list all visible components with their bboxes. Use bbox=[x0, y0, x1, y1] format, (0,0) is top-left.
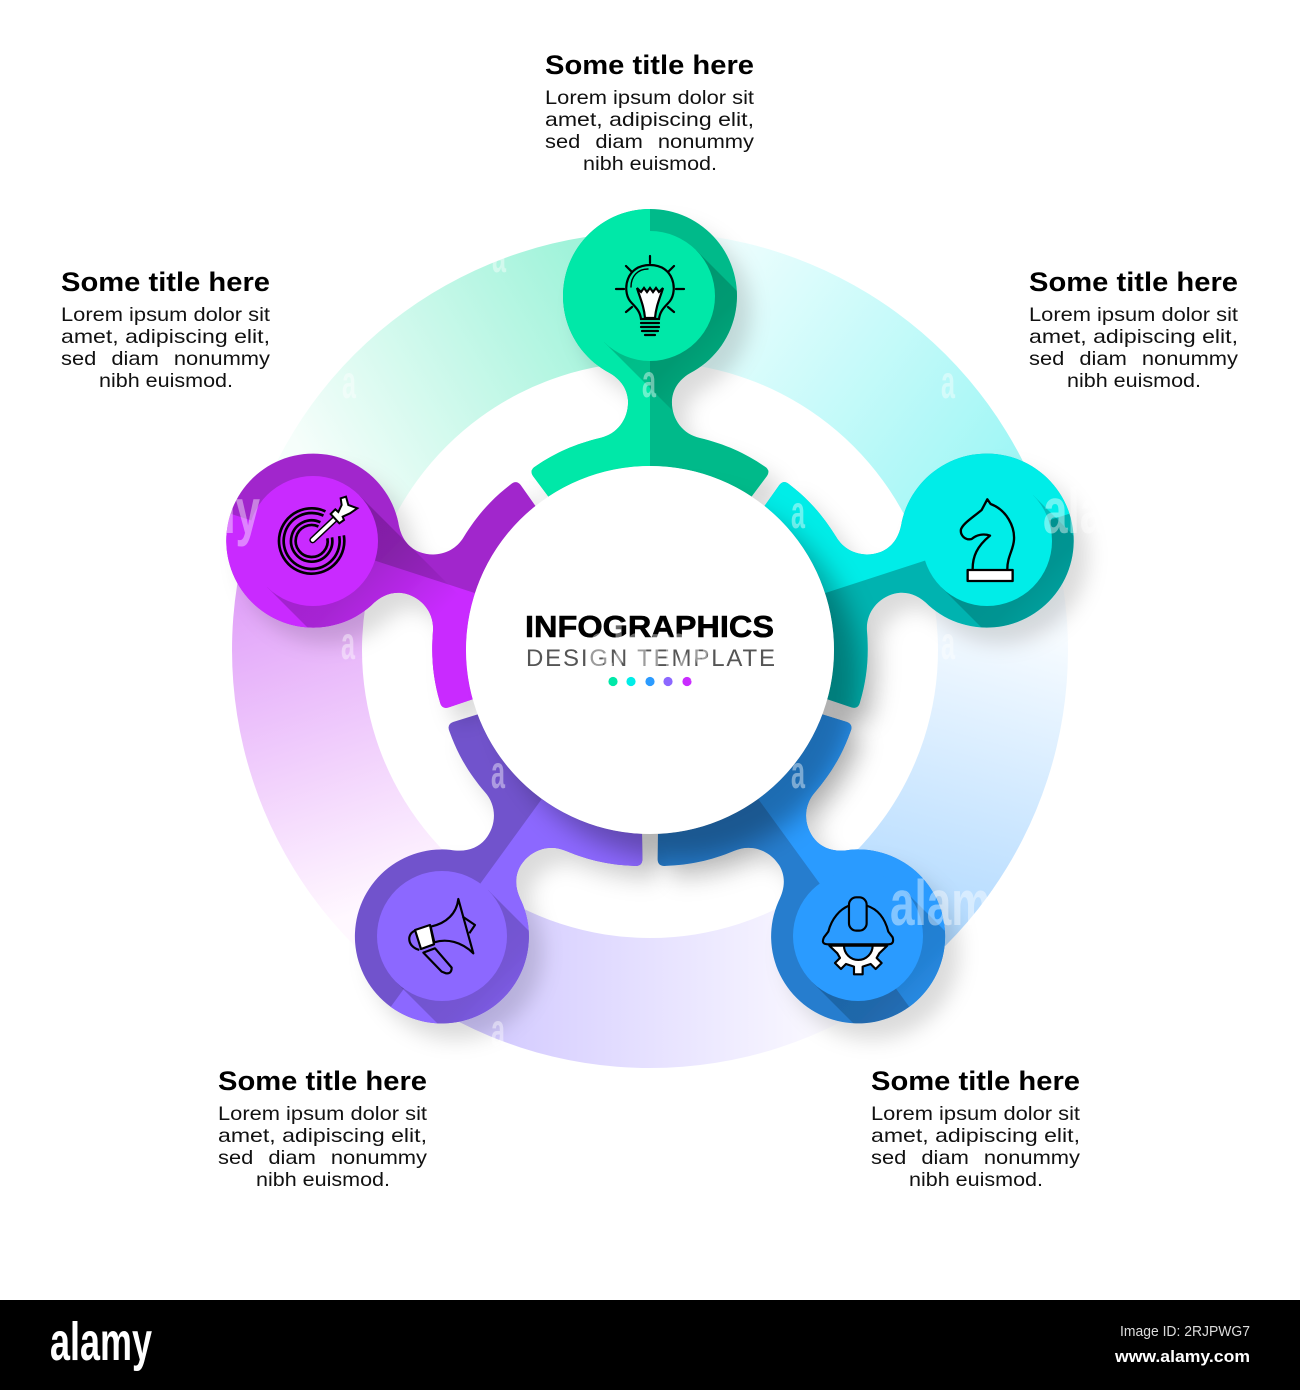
center heading bbox=[525, 609, 775, 686]
central circle shadow bbox=[496, 496, 860, 860]
watermark marks: alamy bbox=[588, 610, 713, 682]
central white circle bbox=[466, 466, 834, 834]
ring segment: green bbox=[252, 232, 650, 561]
ring segment: purple bbox=[404, 883, 896, 1068]
watermark marks: a bbox=[491, 1004, 505, 1056]
title: Some title here bbox=[871, 1066, 1080, 1096]
node: magenta, left bbox=[226, 454, 542, 726]
body copy: amet, adipiscing elit, bbox=[61, 326, 270, 348]
watermark marks: a bbox=[791, 486, 805, 538]
icon: megaphone bbox=[409, 899, 475, 973]
body copy: Lorem ipsum dolor sit bbox=[545, 87, 755, 109]
body copy bbox=[218, 1103, 428, 1191]
watermark marks: a bbox=[341, 617, 355, 669]
body copy: nibh euismod. bbox=[1067, 370, 1201, 392]
body copy bbox=[545, 87, 755, 175]
ring segment: cyan bbox=[650, 232, 1048, 561]
watermark marks: a bbox=[491, 746, 505, 798]
text block: top bbox=[545, 50, 755, 175]
outer gradient ring bbox=[232, 232, 1068, 1068]
body copy: nibh euismod. bbox=[909, 1169, 1043, 1191]
watermark marks: a bbox=[791, 746, 805, 798]
title: Some title here bbox=[218, 1066, 427, 1096]
watermark marks: alamy bbox=[1043, 475, 1168, 547]
watermark marks: alamy bbox=[890, 867, 1015, 939]
text block: upper right bbox=[1029, 267, 1239, 392]
website: www.alamy.com bbox=[1114, 1347, 1250, 1366]
text block: upper left bbox=[61, 267, 271, 392]
body copy: sed diam nonummy bbox=[871, 1147, 1080, 1169]
footer logo: alamy bbox=[50, 1312, 152, 1372]
ring segment: blue bbox=[819, 521, 1068, 988]
body copy: Lorem ipsum dolor sit bbox=[61, 304, 271, 326]
body copy: amet, adipiscing elit, bbox=[545, 109, 754, 131]
body copy: amet, adipiscing elit, bbox=[1029, 326, 1238, 348]
title: Some title here bbox=[545, 50, 754, 80]
heading line: INFOGRAPHICS: INFOGRAPHICS bbox=[525, 609, 774, 644]
body copy: nibh euismod. bbox=[256, 1169, 390, 1191]
ring segment: magenta bbox=[232, 521, 481, 988]
subheading: DESIGN TEMPLATE: DESIGN TEMPLATE bbox=[526, 645, 775, 672]
icon: chess knight bbox=[961, 499, 1014, 581]
node: green, top bbox=[532, 209, 783, 506]
icon: light bulb bbox=[616, 256, 684, 335]
icon: target with arrow bbox=[279, 497, 357, 574]
watermark marks: a bbox=[941, 356, 955, 408]
body copy bbox=[871, 1103, 1081, 1191]
text block: lower left bbox=[218, 1066, 428, 1191]
body copy: sed diam nonummy bbox=[61, 348, 270, 370]
title: Some title here bbox=[61, 267, 270, 297]
body copy: sed diam nonummy bbox=[545, 131, 754, 153]
body copy: Lorem ipsum dolor sit bbox=[871, 1103, 1081, 1125]
watermark marks bbox=[135, 230, 1168, 1056]
watermark marks: a bbox=[342, 356, 356, 408]
text block: lower right bbox=[871, 1066, 1081, 1191]
body copy: sed diam nonummy bbox=[1029, 348, 1238, 370]
colour dots bbox=[608, 677, 692, 686]
watermark marks: a bbox=[492, 230, 506, 282]
body copy: Lorem ipsum dolor sit bbox=[218, 1103, 428, 1125]
watermark marks: a bbox=[642, 355, 656, 407]
node: purple, lower left bbox=[354, 714, 662, 1046]
node: blue, lower right bbox=[658, 714, 966, 1046]
body copy: amet, adipiscing elit, bbox=[871, 1125, 1080, 1147]
body copy: amet, adipiscing elit, bbox=[218, 1125, 427, 1147]
body copy: nibh euismod. bbox=[99, 370, 233, 392]
watermark marks: a bbox=[941, 617, 955, 669]
body copy bbox=[1029, 304, 1239, 392]
body copy bbox=[61, 304, 271, 392]
node: cyan, right bbox=[764, 454, 1094, 727]
body copy: sed diam nonummy bbox=[218, 1147, 427, 1169]
image id: Image ID: 2RJPWG7 bbox=[1120, 1323, 1250, 1340]
icon: helmet and gear bbox=[823, 897, 893, 974]
footer bar bbox=[0, 1300, 1300, 1390]
watermark marks: alamy bbox=[135, 475, 260, 547]
body copy: Lorem ipsum dolor sit bbox=[1029, 304, 1239, 326]
title: Some title here bbox=[1029, 267, 1238, 297]
body copy: nibh euismod. bbox=[583, 153, 717, 175]
